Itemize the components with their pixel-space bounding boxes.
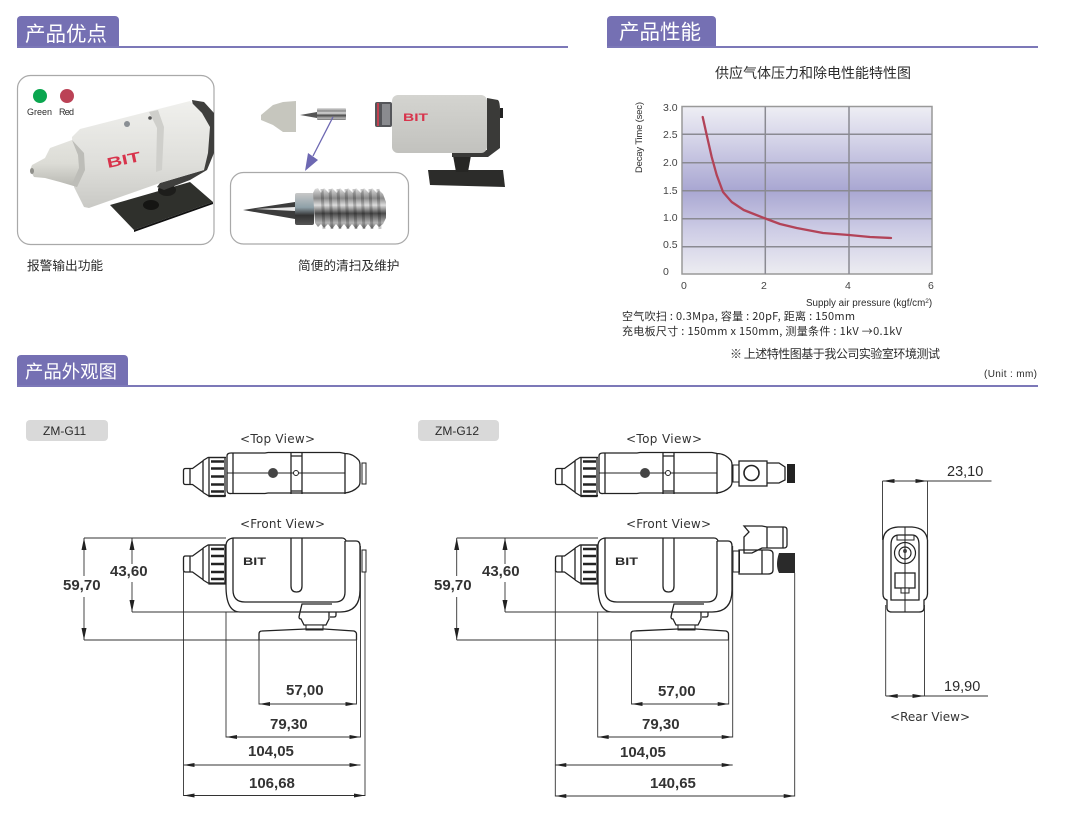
view label: ZM-G11 front: <Front View> — [240, 517, 325, 531]
heading: product performance — [607, 15, 1038, 48]
photo: ionizer with mount — [30, 100, 214, 232]
curve — [703, 117, 891, 238]
fitting — [733, 526, 795, 574]
red label: Red — [59, 107, 74, 117]
x axis ticks — [681, 280, 934, 292]
y axis ticks: 0 — [663, 266, 669, 278]
dimensions: ZM-G11 — [63, 538, 365, 798]
y axis ticks: 1.5 — [663, 185, 678, 197]
test conditions: 充电板尺寸 : 150mm x 150mm, 测量条件 : 1kV →0.1kV — [622, 323, 903, 339]
x axis ticks: 0 — [681, 280, 687, 292]
heading: product advantages: 产品优点 — [25, 17, 107, 47]
drawing: ZM-G12 front view — [556, 526, 795, 640]
panel: easy cleaning photos — [261, 95, 505, 187]
model tag: ZM-G11: ZM-G11 — [43, 424, 86, 438]
x axis title: ) — [929, 298, 932, 309]
caption: easy cleaning: 简便的清扫及维护 — [298, 255, 400, 274]
dimensions: ZM-G11: 57,00 — [286, 682, 324, 699]
icon: green indicator — [33, 89, 47, 103]
dimensions: ZM-G11: 59,70 — [63, 577, 101, 594]
y axis ticks: 2.0 — [663, 157, 678, 169]
photo: nozzle cap — [261, 101, 296, 132]
y axis ticks: 0.5 — [663, 239, 678, 251]
x axis ticks: 4 — [845, 280, 851, 292]
dimensions: ZM-G12: 104,05 — [620, 744, 666, 761]
dimensions: ZM-G11: 106,68 — [249, 775, 295, 792]
logo: BIT — [403, 112, 428, 124]
drawing: ZM-G12 top view — [556, 452, 795, 496]
chart: decay time vs pressure — [634, 102, 934, 309]
model tag: ZM-G12 — [418, 420, 499, 441]
model tag: ZM-G11 — [26, 420, 108, 441]
dimensions: rear view: 19,90 — [944, 679, 980, 695]
caption: alarm output: 报警输出功能 — [27, 255, 103, 274]
view label: ZM-G12 top: <Top View> — [626, 432, 702, 446]
y axis ticks: 2.5 — [663, 129, 678, 141]
photo: needle small — [300, 108, 346, 120]
view label: ZM-G11 top: <Top View> — [240, 432, 315, 446]
dimensions: ZM-G12: 43,60 — [482, 563, 520, 580]
dimensions: ZM-G11: 104,05 — [248, 743, 294, 760]
panel: needle detail — [230, 172, 408, 244]
dimensions: ZM-G12: 57,00 — [658, 683, 696, 700]
drawing: rear view — [883, 527, 928, 612]
heading: product appearance: 产品外观图 — [25, 358, 117, 384]
x axis ticks: 6 — [928, 280, 934, 292]
logo: BIT — [105, 148, 143, 171]
unit note: (Unit : mm) — [984, 369, 1037, 380]
note: ※ 上述特性图基于我公司实验室环境测试 — [730, 345, 940, 362]
logo: BIT — [243, 556, 266, 568]
panel: alarm output photo — [18, 76, 214, 244]
x axis ticks: 2 — [761, 280, 767, 292]
icon: red indicator — [60, 89, 74, 103]
dimensions: ZM-G12: 59,70 — [434, 577, 472, 594]
dimensions: rear view — [882, 464, 992, 698]
y axis ticks: 1.0 — [663, 212, 678, 224]
dimensions: ZM-G12: 140,65 — [650, 775, 696, 792]
x axis title: Supply air pressure (kgf/cm — [806, 298, 925, 309]
green label: Green — [27, 107, 52, 117]
heading: product advantages — [17, 16, 568, 48]
dimensions: rear view: 23,10 — [947, 464, 983, 480]
drawing: ZM-G11 front view — [184, 538, 366, 640]
model tag: ZM-G12: ZM-G12 — [435, 424, 479, 438]
y axis title: Decay Time (sec) — [634, 102, 645, 173]
y axis ticks — [663, 102, 678, 278]
logo: BIT — [615, 556, 638, 568]
fitting — [733, 461, 795, 486]
test conditions: 空气吹扫 : 0.3Mpa, 容量 : 20pF, 距离 : 150mm — [622, 308, 855, 324]
arrow: to detail — [305, 117, 333, 171]
dimensions: ZM-G12: 79,30 — [642, 716, 680, 733]
drawing: ZM-G11 top view — [184, 452, 366, 496]
dimensions: ZM-G11: 43,60 — [110, 563, 148, 580]
chart title: 供应气体压力和除电性能特性图 — [715, 63, 911, 83]
test conditions — [622, 308, 903, 339]
heading: product performance: 产品性能 — [619, 15, 701, 45]
dimensions: ZM-G11: 79,30 — [270, 716, 308, 733]
y axis ticks: 3.0 — [663, 102, 678, 114]
view label: rear: <Rear View> — [890, 710, 970, 724]
heading: product appearance — [17, 355, 1038, 387]
view label: ZM-G12 front: <Front View> — [626, 517, 711, 531]
photo: ionizer rear — [375, 95, 505, 187]
dimensions: ZM-G12 — [434, 538, 795, 798]
x axis title: 2 — [925, 298, 929, 305]
